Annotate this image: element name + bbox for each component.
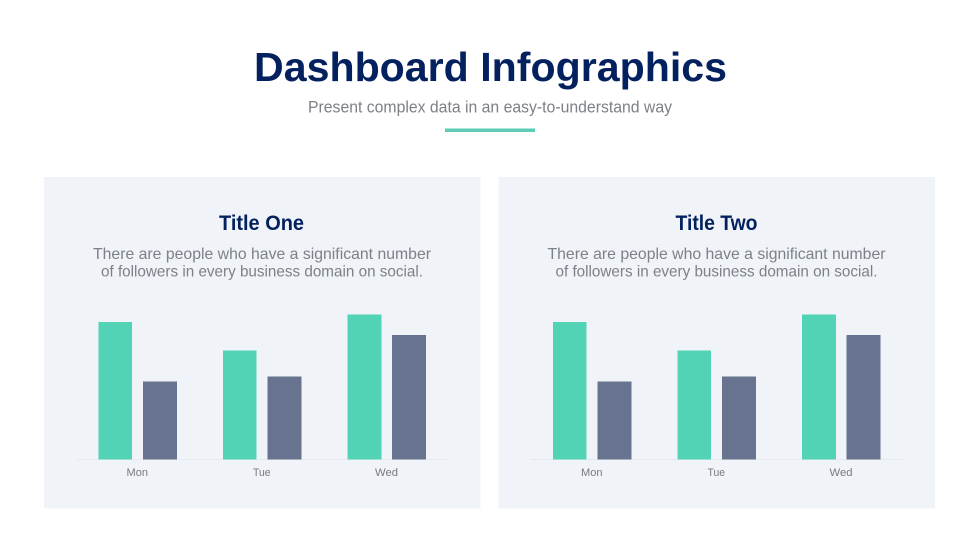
panel description: There are people who have a significant number [548, 246, 886, 263]
accent rule [445, 128, 535, 132]
axis labels: Mon [126, 467, 148, 479]
panel description: of followers in every business domain on social. [101, 264, 423, 280]
Wed bars [802, 314, 880, 460]
axis labels: Tue [253, 467, 270, 479]
axis labels [126, 467, 398, 479]
Mon bars [553, 322, 632, 460]
axis labels [581, 467, 852, 479]
axis labels: Tue [708, 467, 725, 479]
axis labels: Wed [375, 467, 398, 479]
axis labels: Mon [581, 467, 602, 479]
panel description: of followers in every business domain on social. [556, 264, 878, 280]
panel: title one [44, 177, 480, 508]
panel description [93, 246, 432, 280]
axis labels: Wed [830, 467, 852, 479]
Wed bars [348, 314, 426, 460]
title: Dashboard Infographics [254, 44, 727, 90]
bar chart [530, 314, 902, 479]
panel heading: Title One [219, 212, 304, 235]
subtitle: Present complex data in an easy-to-understand way [308, 98, 673, 116]
panel heading: Title Two [676, 212, 758, 235]
panel description [548, 246, 886, 280]
panel: title two [498, 177, 935, 508]
Tue bars [678, 350, 756, 460]
Tue bars [223, 350, 302, 460]
panel description: There are people who have a significant number [93, 246, 432, 263]
bar chart [76, 314, 448, 479]
Mon bars [98, 322, 177, 460]
